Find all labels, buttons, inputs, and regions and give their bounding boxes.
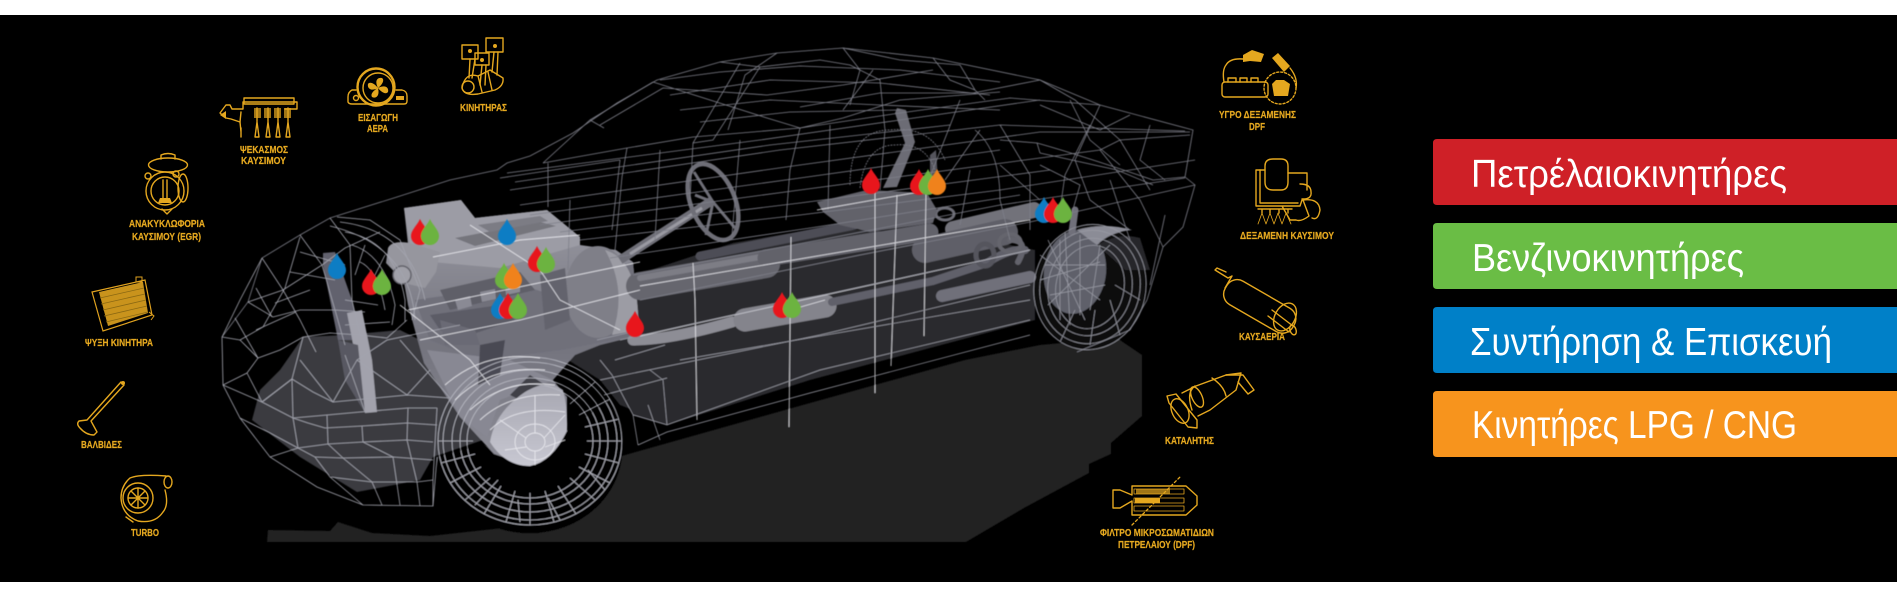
gear lever [883, 108, 915, 188]
label: fuel injection: ΨΕΚΑΣΜΟΣ [240, 144, 288, 156]
right-of-engine dark panel [540, 300, 640, 413]
legend: diesel engines [1433, 139, 1897, 205]
label: engine: ΚΙΝΗΤΗΡΑΣ [460, 102, 507, 114]
label: EGR [129, 218, 205, 243]
label: DPF fluid: ΥΓΡΟ ΔΕΞΑΜΕΝΗΣ [1219, 109, 1296, 121]
filler neck [930, 150, 938, 190]
icon: catalytic converter [1167, 373, 1254, 428]
label: air intake: ΑΕΡΑ [367, 123, 388, 135]
label: fuel injection: ΚΑΥΣΙΜΟΥ [241, 155, 286, 167]
label: air intake [358, 112, 398, 135]
label: DPF fluid [1219, 109, 1296, 133]
icon: radiator [92, 277, 154, 331]
front strut [323, 252, 377, 413]
wireframe: side sill and rear wheel [597, 214, 1158, 445]
wireframe: front wheel [438, 357, 622, 525]
front hub [490, 384, 567, 466]
front wheel [437, 400, 622, 533]
icon: air intake fan [348, 68, 407, 106]
drivetrain tubes [633, 208, 1075, 340]
icon: valve [78, 381, 125, 435]
fluid drops on the car [328, 168, 1072, 337]
icon: exhaust muffler [1215, 268, 1301, 338]
label: turbo: TURBO [131, 527, 159, 539]
label: catalytic converter: ΚΑΤΑΛΗΤΗΣ [1165, 435, 1214, 447]
wireframe: roof and cabin [222, 48, 1195, 352]
legend: petrol engines [1433, 223, 1897, 289]
label: EGR: ΑΝΑΚΥΚΛΩΦΟΡΙΑ [129, 218, 205, 230]
label: fuel tank: ΔΕΞΑΜΕΝΗ ΚΑΥΣΙΜΟΥ [1240, 230, 1334, 242]
legend: petrol engines: Βενζινοκινητήρες [1472, 237, 1744, 280]
steering column and wheel [620, 157, 748, 260]
icon: fuel injection rail [220, 98, 297, 137]
wireframe: hub and engine arcs [400, 190, 1030, 465]
car cutaway illustration [222, 48, 1195, 542]
legend: diesel engines: Πετρέλαιοκινητήρες [1471, 153, 1787, 196]
fuel tank [817, 190, 937, 232]
legend: LPG and CNG engines [1433, 391, 1897, 457]
label: DPF: ΦΙΛΤΡΟ ΜΙΚΡΟΣΩΜΑΤΙΔΙΩΝ [1100, 527, 1214, 539]
label: valves: ΒΑΛΒΙΔΕΣ [81, 439, 122, 451]
label: DPF [1100, 527, 1214, 551]
icon: EGR valve [145, 154, 188, 214]
icon: fuel tank system [1256, 159, 1320, 224]
legend: maintenance and repair [1433, 307, 1897, 373]
label: DPF fluid: DPF [1249, 121, 1265, 133]
legend: LPG and CNG engines: Κινητήρες LPG / CNG [1472, 404, 1797, 447]
wireframe: nose and front fender [222, 217, 460, 506]
label: exhaust: ΚΑΥΣΑΕΡΙΑ [1239, 331, 1285, 343]
icon: engine pistons [462, 38, 503, 94]
label: DPF: ΠΕΤΡΕΛΑΙΟΥ (DPF) [1118, 539, 1195, 551]
rear wheel [1022, 214, 1158, 360]
label: air intake: ΕΙΣΑΓΩΓΗ [358, 112, 398, 124]
icon: turbo [121, 475, 172, 522]
icon: diesel particulate filter [1113, 477, 1197, 525]
icon: DPF fluid tank [1222, 50, 1296, 104]
hood and front bumper panel [252, 330, 490, 492]
car body side panel [600, 228, 1035, 425]
label: engine cooling: ΨΥΞΗ ΚΙΝΗΤΗΡΑ [85, 337, 153, 349]
label: EGR: ΚΑΥΣΙΜΟΥ (EGR) [132, 231, 201, 243]
ground shadow [267, 338, 1142, 542]
rear wheel hub [1038, 226, 1150, 318]
engine block [386, 200, 640, 466]
label: fuel injection [240, 144, 288, 167]
legend: maintenance and repair: Συντήρηση & Επισκευή [1470, 321, 1832, 364]
